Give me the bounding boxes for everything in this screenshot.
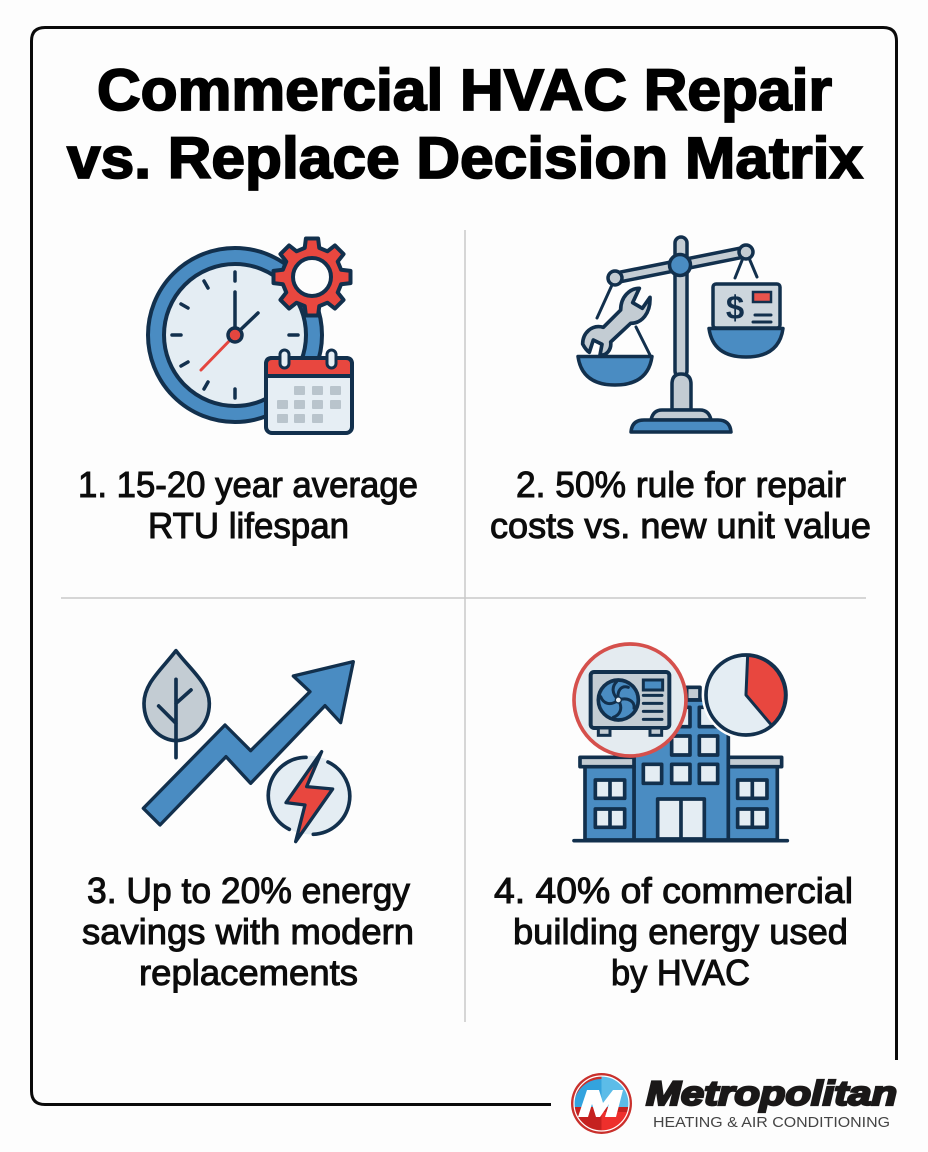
invoice (713, 284, 780, 328)
label 1: 1. 15-20 year average (78, 464, 418, 505)
label 4 (494, 870, 853, 993)
label 4: by HVAC (611, 952, 750, 993)
icon: balance scale with wrench and invoice (578, 237, 783, 432)
title (67, 58, 863, 191)
clock (148, 248, 322, 422)
label 3: 3. Up to 20% energy (87, 870, 410, 911)
logo tagline: HEATING & AIR CONDITIONING (653, 1114, 890, 1131)
icon: leaf, arrow and lightning (143, 651, 353, 842)
logo: Metropolitan Heating & Air Conditioning (571, 1073, 897, 1134)
label 4: 4. 40% of commercial (494, 870, 853, 911)
label 1 (78, 464, 418, 546)
scale base (631, 374, 731, 432)
title: vs. Replace Decision Matrix (67, 126, 863, 191)
label 2 (490, 464, 871, 546)
gear (274, 238, 350, 316)
panel: RTU lifespan (78, 238, 418, 546)
scale post (675, 237, 687, 377)
building (580, 687, 782, 840)
scale pivots (608, 245, 753, 285)
title: Commercial HVAC Repair (97, 58, 832, 123)
panel: 50% rule (490, 237, 871, 546)
label 1: RTU lifespan (148, 505, 349, 546)
pie chart (702, 651, 790, 739)
right pan (709, 328, 783, 357)
wrench (583, 288, 650, 355)
rising arrow (143, 662, 353, 825)
icon: clock, gear and calendar (148, 238, 352, 433)
label 2: 2. 50% rule for repair (516, 464, 846, 505)
gear hole (293, 258, 331, 296)
AC unit callout (574, 644, 686, 756)
left pan (578, 356, 652, 385)
label 3: replacements (139, 952, 358, 993)
label 4: building energy used (513, 911, 848, 952)
leaf (144, 651, 209, 758)
label 3 (82, 870, 414, 993)
panel: energy savings (82, 651, 414, 993)
icon: building, AC unit and pie chart (574, 644, 790, 841)
calendar (266, 350, 352, 433)
invoice: $ (726, 289, 744, 326)
logo badge (571, 1073, 632, 1134)
label 3: savings with modern (82, 911, 414, 952)
logo wordmark: Metropolitan (646, 1075, 897, 1113)
scale strings (597, 258, 757, 355)
energy circle (268, 752, 350, 842)
scale beam (615, 252, 745, 278)
panel: HVAC share (494, 644, 853, 993)
label 2: costs vs. new unit value (490, 505, 871, 546)
